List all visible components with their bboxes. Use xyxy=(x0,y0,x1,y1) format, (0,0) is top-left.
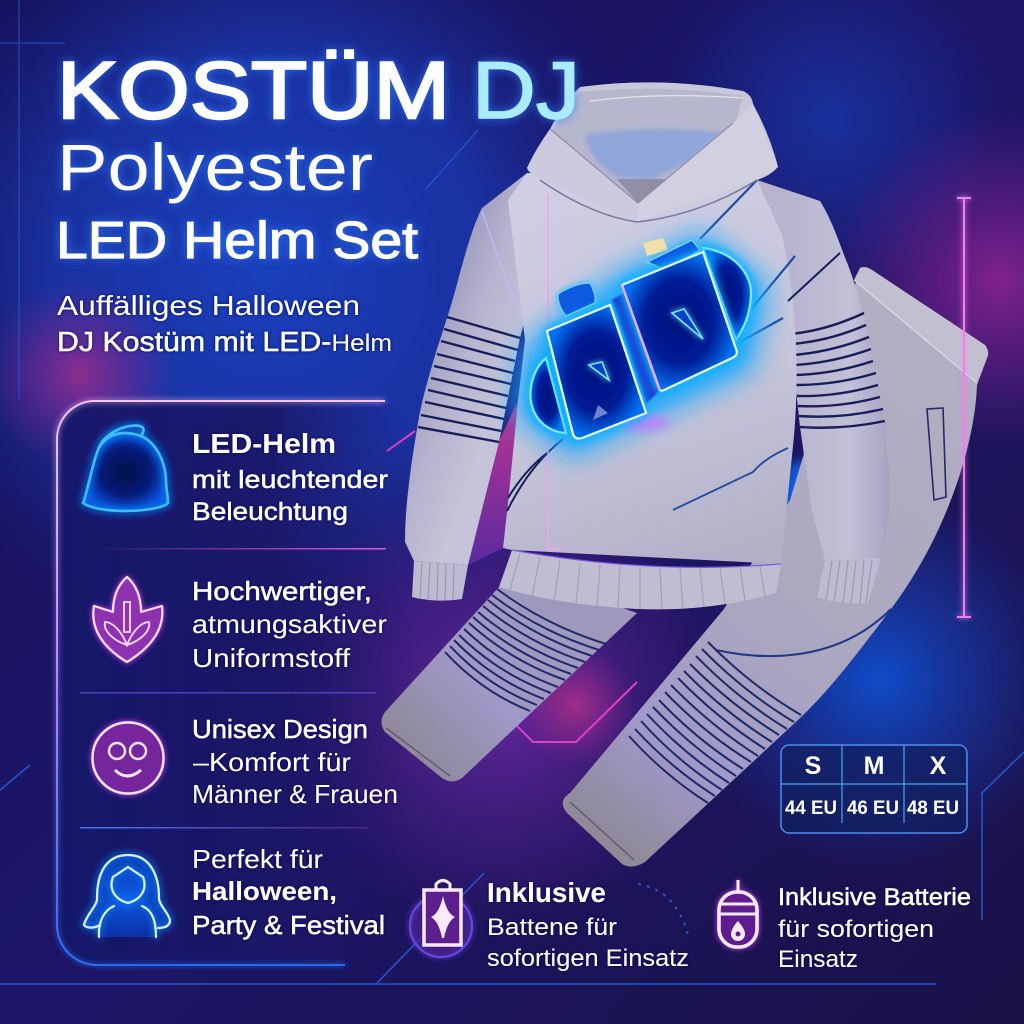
device halo xyxy=(515,232,768,458)
feature 2 text xyxy=(192,576,387,673)
battery text: Inklusive xyxy=(487,877,606,908)
callout: battery left xyxy=(410,877,689,972)
feature 3 text: Männer & Frauen xyxy=(192,779,398,809)
icon: smiley xyxy=(92,722,164,794)
size table xyxy=(781,745,967,833)
hoodie torso xyxy=(482,173,840,609)
panel border xyxy=(57,401,385,965)
size headers xyxy=(805,752,947,780)
title xyxy=(56,46,580,270)
size values: 46 EU xyxy=(847,798,899,819)
feature 3 text: Unisex Design xyxy=(192,714,368,744)
pants right leg xyxy=(563,267,988,867)
feature 1 text xyxy=(192,428,388,526)
size headers: X xyxy=(930,752,947,780)
divider 2 xyxy=(80,692,376,694)
hoodie left sleeve xyxy=(405,173,530,601)
pink measuring line xyxy=(957,198,971,617)
divider 3 xyxy=(80,827,368,828)
feature 1 text: Beleuchtung xyxy=(192,498,348,526)
battery right text: für sofortigen xyxy=(778,916,934,943)
device small triangle xyxy=(593,405,608,420)
icon: battery xyxy=(410,880,472,957)
battery right text xyxy=(778,884,971,973)
size values xyxy=(785,798,959,819)
device connector xyxy=(612,290,660,404)
divider 1 xyxy=(84,548,386,550)
battery text xyxy=(487,877,689,972)
device left box xyxy=(547,305,646,438)
feature 4 text: Perfekt für xyxy=(192,844,323,874)
neon LED device on chest xyxy=(515,232,768,458)
feature 2 text: Uniformstoff xyxy=(192,643,351,673)
battery text: Battene für xyxy=(487,914,617,941)
panel: features xyxy=(57,401,398,965)
title line: KOSTÜM: KOSTÜM xyxy=(57,46,450,136)
icon: LED helmet xyxy=(83,426,168,511)
feature 3 text: –Komfort für xyxy=(193,747,351,777)
hoodie hood xyxy=(527,82,778,222)
device glyph triangles xyxy=(589,309,703,380)
icon: person xyxy=(84,855,170,937)
size values: 44 EU xyxy=(785,798,837,819)
decorative pink accents xyxy=(387,431,637,742)
subtitle xyxy=(57,290,392,357)
hoodie right sleeve xyxy=(757,180,890,603)
feature 4 text: Party & Festival xyxy=(192,910,385,940)
device top caps xyxy=(558,240,700,316)
panel background: features xyxy=(57,401,410,965)
product: pants and hoodie xyxy=(382,82,988,867)
device yellow cap xyxy=(643,238,668,256)
feature 4 text: Halloween, xyxy=(192,876,337,906)
title line: DJ: DJ xyxy=(472,46,580,136)
feature 3 text xyxy=(192,714,398,809)
size values: 48 EU xyxy=(907,798,959,819)
subtitle line 1: Auffälliges Halloween xyxy=(57,290,360,321)
device right box xyxy=(622,252,737,391)
feature 1 text: LED-Helm xyxy=(192,428,336,459)
title line: LED Helm Set: LED Helm Set xyxy=(56,212,419,270)
battery right text: Einsatz xyxy=(778,946,858,973)
size headers: S xyxy=(805,752,821,780)
pants left leg xyxy=(382,587,637,782)
title line: Polyester: Polyester xyxy=(57,130,373,204)
battery right text: Inklusive Batterie xyxy=(778,884,971,911)
icon: remote device xyxy=(719,880,757,947)
size headers: M xyxy=(864,752,884,780)
device side lobes xyxy=(530,248,751,433)
feature 2 text: Hochwertiger, xyxy=(192,576,372,606)
icon: leaf fabric xyxy=(93,577,162,662)
battery text: sofortigen Einsatz xyxy=(487,945,689,972)
feature 1 text: mit leuchtender xyxy=(192,466,388,494)
glow accents behind hoodie xyxy=(468,401,822,600)
callout: battery right xyxy=(719,880,971,973)
feature 2 text: atmungsaktiver xyxy=(192,609,387,639)
subtitle line 2: DJ Kostüm mit LED- Helm xyxy=(57,326,392,357)
dashed arc decoration xyxy=(638,884,688,935)
feature 4 text xyxy=(192,844,385,940)
